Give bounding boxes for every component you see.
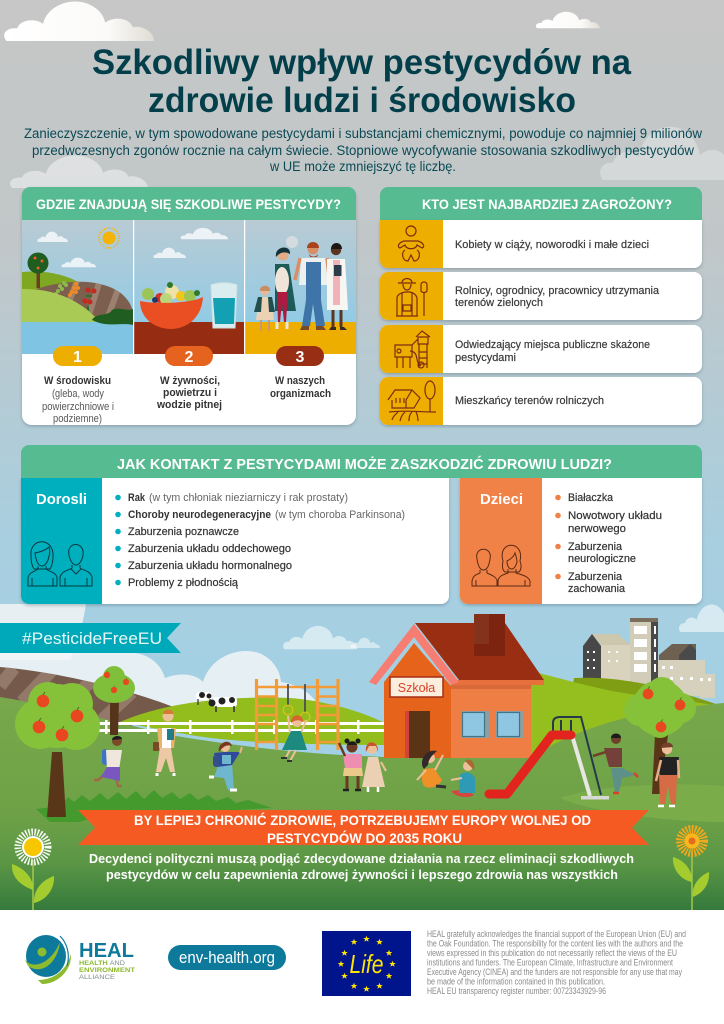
child running with backpack (94, 736, 122, 786)
cloud: left behind banner (0, 604, 86, 660)
girl on rings (281, 715, 307, 761)
badge 2 (165, 346, 213, 366)
policy message: Decydenci polityczni muszą podjąć zdecydowane działania na rzecz eliminacji szkodliwych (89, 851, 634, 866)
cloud: small behind school (350, 638, 380, 648)
title (92, 43, 632, 120)
badge 1: 1 (73, 349, 82, 366)
illustration: food air water (134, 220, 244, 354)
brown field (0, 667, 176, 730)
website pill: env-health.org (179, 948, 275, 967)
cloud: behind intro right (600, 127, 724, 180)
intro paragraph: przedwczesnych zgonów rocznie na całym świecie. Stopniowe wycofywanie stosowania szkodliwych pestycydów (32, 143, 694, 158)
list: children: zachowania (568, 583, 626, 595)
slide (489, 717, 609, 800)
header: where: GDZIE ZNAJDUJĄ SIĘ SZKODLIWE PESTYCYDY? (36, 196, 341, 212)
list: adults: Rak (128, 492, 146, 504)
icon: farmer (396, 278, 427, 316)
panel: children (460, 478, 702, 604)
cloud: far right (679, 604, 724, 632)
orange call-to-action banner: BY LEPIEJ CHRONIĆ ZDROWIE, POTRZEBUJEMY EUROPY WOLNEJ OD (134, 813, 591, 828)
badge 3 (276, 346, 324, 366)
caption 2 (156, 375, 222, 411)
panel: children: Dzieci (480, 491, 523, 508)
panel: where harmful pesticides are (22, 187, 356, 425)
row: farmers, gardeners (380, 272, 702, 320)
list: children: Białaczka (568, 492, 614, 504)
tree: right apple (624, 677, 696, 794)
badge 3: 3 (296, 349, 305, 366)
child with books (153, 710, 176, 776)
header: where (22, 187, 356, 220)
doctor (327, 243, 348, 330)
caption 2: wodzie pitnej (156, 399, 222, 411)
caption 2: W żywności, (160, 375, 220, 387)
logo: HEAL: ENVIRONMENT (79, 967, 135, 974)
header: who: KTO JEST NAJBARDZIEJ ZAGROŻONY? (422, 196, 672, 212)
row: pregnant women, babies (380, 220, 702, 268)
hill: olive background (560, 678, 724, 760)
hill: right foreground (500, 671, 724, 800)
cloud: top right (536, 12, 600, 28)
tree: large apple (15, 682, 100, 817)
list: adults: Problemy z płodnością (128, 577, 239, 589)
list: children: Zaburzenia (568, 571, 623, 583)
header: how contact harms: JAK KONTAKT Z PESTYCYDAMI MOŻE ZASZKODZIĆ ZDROWIU LUDZI? (117, 455, 612, 473)
hashtag ribbon: #PesticideFreeEU (22, 629, 162, 648)
logo: EU LIFE: Life (350, 949, 384, 979)
badge 1 (53, 346, 102, 366)
caption 1: W środowisku (44, 375, 111, 387)
logo: HEAL: HEALTH AND (79, 960, 125, 967)
cloud: sky right of banner (283, 626, 357, 649)
panel: adults (21, 478, 449, 604)
panel: adults: Dorosli (36, 491, 87, 508)
caption 1: podziemne) (53, 413, 102, 425)
intro paragraph: Zanieczyszczenie, w tym spowodowane pestycydami i substancjami chemicznymi, powoduje co najmniej 9 milionów (24, 126, 702, 141)
panel: how contact harms health (21, 445, 702, 604)
caption 3: W naszych (275, 375, 325, 387)
cloud: top left (4, 1, 154, 41)
grass: right patch (560, 784, 724, 822)
logo: EU LIFE (322, 931, 411, 996)
school (369, 614, 544, 758)
header: how contact harms (21, 445, 702, 478)
icon: children (472, 545, 530, 586)
sunflower: right (673, 830, 709, 910)
cloud: large behind hills (0, 651, 316, 715)
title: Szkodliwy wpływ pestycydów na (92, 43, 632, 82)
header: who (380, 187, 702, 220)
sitting girl (417, 751, 446, 788)
fence (96, 720, 391, 734)
buildings (583, 618, 715, 698)
ground (0, 697, 724, 910)
farmer (295, 242, 330, 330)
illustration: people (245, 220, 356, 354)
list: children (555, 492, 662, 595)
woman (275, 248, 296, 329)
sitting boy (451, 760, 475, 797)
funding acknowledgement: HEAL EU transparency register number: 00723343929-96 (427, 986, 606, 996)
boy at slide (593, 734, 638, 793)
row: visitors to public places (380, 325, 702, 373)
icon: adults (28, 542, 92, 586)
list: adults: Zaburzenia poznawcze (128, 526, 239, 538)
caption 3: organizmach (270, 388, 331, 400)
list: adults: Zaburzenia układu hormonalnego (128, 560, 292, 572)
badge 2: 2 (185, 349, 194, 366)
scene: landscape (0, 604, 724, 910)
panel: who is most at risk (380, 187, 702, 425)
list: adults: Choroby neurodegeneracyjne (128, 509, 271, 521)
list: adults: Zaburzenia układu oddechowego (128, 543, 291, 555)
girl running in overalls (209, 742, 242, 790)
policy message: pestycydów w celu zapewnienia zdrowej żywności i lepszego zdrowia nas wszystkich (106, 867, 618, 882)
row: residents of agricultural areas: Mieszkańcy terenów rolniczych (455, 395, 604, 407)
grass tuft (36, 790, 272, 822)
boy by tree (656, 743, 679, 806)
child (254, 286, 275, 331)
caption 1: (gleba, wody (52, 388, 104, 400)
girl in pink (339, 738, 363, 790)
orange call-to-action banner: PESTYCYDÓW DO 2035 ROKU (267, 831, 462, 846)
intro paragraph (24, 126, 702, 174)
list: adults: (w tym chłoniak nieziarniczy i rak prostaty) (149, 492, 348, 504)
cows (196, 692, 237, 712)
title: zdrowie ludzi i środowisko (148, 81, 576, 120)
caption 3 (270, 375, 331, 400)
list: children: nerwowego (568, 523, 626, 535)
funding acknowledgement: be made of the information contained in this publication. (427, 976, 605, 986)
tree: small apple (93, 666, 135, 735)
caption 1: powierzchniowe i (42, 401, 114, 413)
logo: HEAL: ALLIANCE (79, 974, 116, 981)
icon: baby (398, 226, 424, 261)
cloud: behind intro left (10, 155, 148, 188)
climbing frame (256, 679, 338, 750)
funding acknowledgement (427, 929, 686, 996)
school sign: Szkoła (398, 681, 435, 695)
list: children: neurologiczne (568, 553, 636, 565)
logo: HEAL: HEAL (79, 940, 134, 962)
list: adults: (w tym choroba Parkinsona) (275, 509, 405, 521)
school sign (390, 677, 443, 697)
icon: farm (388, 381, 436, 421)
policy message (89, 851, 634, 882)
row: visitors to public places: pestycydami (455, 352, 516, 364)
row: pregnant women, babies: Kobiety w ciąży, noworodki i małe dzieci (455, 239, 649, 251)
hill: centre (120, 698, 420, 745)
row: residents of agricultural areas (380, 377, 702, 425)
footer (0, 910, 724, 1024)
intro paragraph: w UE może zmniejszyć tę liczbę. (269, 159, 456, 174)
logo: HEAL (24, 935, 135, 984)
list: children: Zaburzenia (568, 541, 623, 553)
list: children: Nowotwory układu (568, 510, 662, 522)
row: farmers, gardeners: Rolnicy, ogrodnicy, pracownicy utrzymania (455, 285, 660, 297)
caption 2: powietrzu i (163, 387, 217, 399)
hashtag ribbon (0, 623, 181, 653)
list: adults (115, 492, 405, 589)
girl in floral dress (362, 742, 386, 792)
row: visitors to public places: Odwiedzający miejsca publiczne skażone (455, 339, 650, 351)
row: farmers, gardeners: terenów zielonych (455, 297, 543, 309)
sunflower: left (12, 832, 54, 910)
illustration: environment (22, 220, 133, 354)
orange call-to-action banner (78, 810, 649, 846)
caption 1 (42, 375, 114, 425)
icon: playground (395, 331, 430, 368)
website pill (168, 945, 286, 970)
